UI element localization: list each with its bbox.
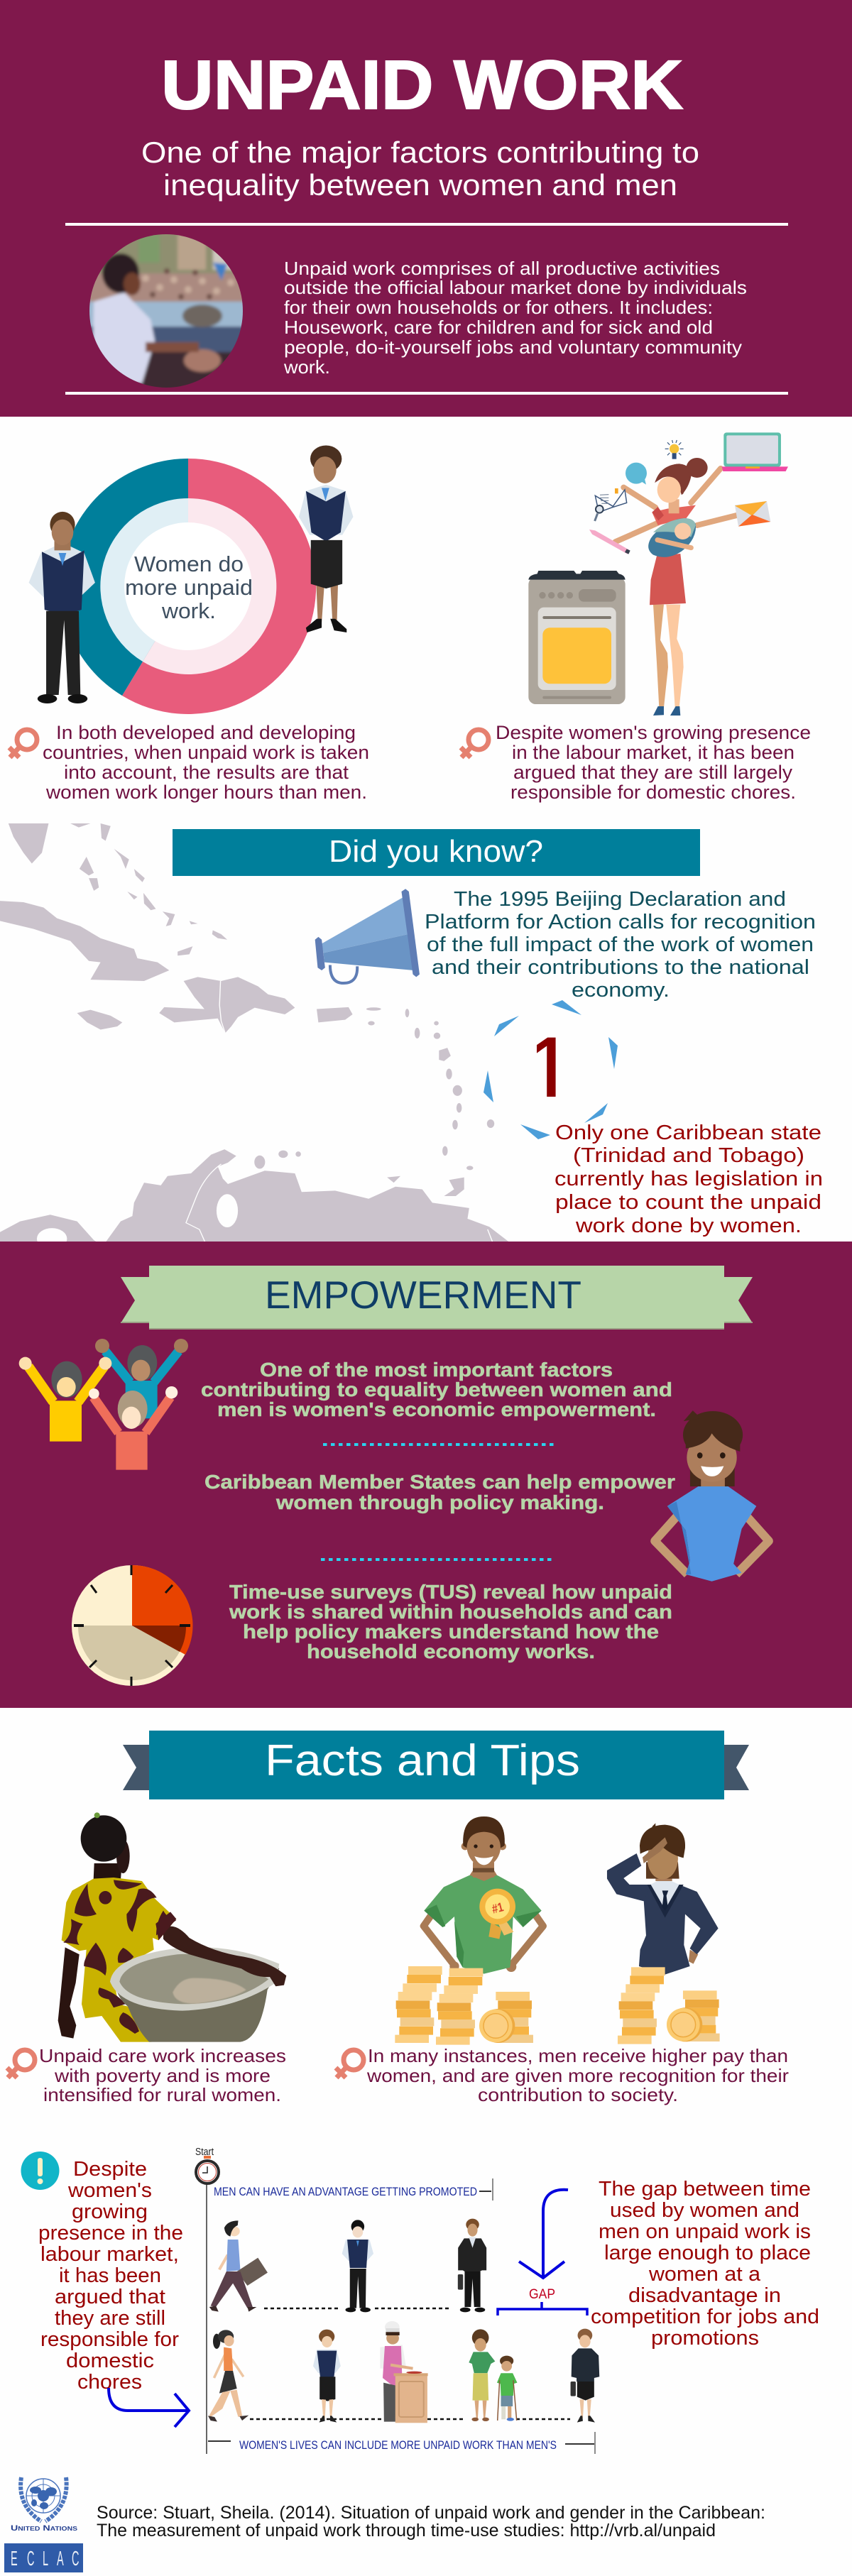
- icon: speech bubble: [626, 463, 647, 485]
- icon: stopwatch: [196, 2156, 219, 2183]
- caption: domestic chores: Despite women's growing presence: [496, 722, 811, 743]
- text: women's responsibility for chores: responsible for: [40, 2328, 179, 2351]
- caption: domestic chores: [496, 722, 811, 803]
- text: gap explanation: The gap between time: [599, 2178, 811, 2200]
- label: women's unpaid work: WOMEN'S LIVES CAN INCLUDE MORE UNPAID WORK THAN MEN'S: [239, 2438, 557, 2452]
- icon: venus symbol: [7, 2050, 35, 2078]
- text: gap explanation: promotions: [651, 2327, 759, 2350]
- figure: woman with child on crutches: [469, 2329, 517, 2421]
- text: women's responsibility for chores: it has been: [59, 2264, 161, 2287]
- donut label: work.: [161, 598, 216, 623]
- icon: laptop: [722, 432, 788, 471]
- text: time-use surveys: help policy makers understand how the: [243, 1621, 659, 1643]
- text: policy making: [204, 1471, 675, 1513]
- caption: women work longer hours: countries, when unpaid work is taken: [43, 742, 369, 763]
- icon: woman figure: [616, 458, 740, 716]
- text: gap explanation: disadvantage in: [628, 2284, 781, 2307]
- logo: ECLAC: ECLAC: [11, 2546, 79, 2570]
- caption: domestic chores: argued that they are still largely: [513, 762, 793, 783]
- banner: empowerment: EMPOWERMENT: [265, 1273, 581, 1317]
- source note: Source: Stuart, Sheila. (2014). Situation of unpaid work and gender in the Caribbean:: [97, 2503, 765, 2523]
- intro paragraph: outside the official labour market done by individuals: [284, 277, 747, 298]
- intro paragraph: for their own households or for others. It includes:: [284, 297, 713, 318]
- figure: walking woman: [208, 2330, 248, 2422]
- text: women's responsibility for chores: Despite: [73, 2158, 147, 2181]
- text: time-use surveys: household economy works.: [307, 1640, 595, 1662]
- caption: domestic chores: responsible for domestic chores.: [510, 782, 796, 803]
- donut label: [125, 552, 253, 623]
- text: Beijing declaration: [425, 888, 816, 1002]
- icon: envelope: [735, 501, 770, 527]
- subtitle: [141, 136, 699, 202]
- text: economic empowerment: [201, 1359, 672, 1420]
- label: men's advantage: MEN CAN HAVE AN ADVANTAGE GETTING PROMOTED: [214, 2185, 477, 2198]
- icon: smiling man: #1: [491, 1900, 505, 1917]
- icon: venus symbol: [336, 2050, 364, 2078]
- start label: Start: [195, 2146, 214, 2158]
- caption: women work longer hours: into account, the results are that: [64, 762, 349, 783]
- icon: multitasking woman with oven: [528, 432, 788, 716]
- donut label: more unpaid: [125, 575, 253, 600]
- icon: man in vest: [29, 512, 95, 703]
- icon: woman in blue shirt: [655, 1410, 769, 1582]
- icon: venus symbol: [461, 730, 488, 757]
- text: Caribbean legislation: [555, 1122, 823, 1237]
- map: Caribbean: [0, 823, 509, 1249]
- text: Beijing declaration: of the full impact of the work of women: [427, 933, 814, 956]
- text: time-use surveys: work is shared within households and can: [229, 1601, 672, 1623]
- text: policy making: women through policy making.: [275, 1491, 604, 1513]
- text: gap explanation: men on unpaid work is: [599, 2220, 811, 2243]
- text: economic empowerment: One of the most important factors: [260, 1359, 613, 1381]
- text: economic empowerment: men is women's economic empowerment.: [217, 1398, 656, 1420]
- text: economic empowerment: contributing to equality between women and: [201, 1379, 672, 1401]
- text: women's responsibility for chores: chores: [77, 2371, 142, 2394]
- text: gap explanation: women at a: [648, 2263, 761, 2286]
- text: time-use surveys: [229, 1581, 672, 1662]
- logo: United Nations: [11, 2477, 78, 2533]
- figures: career stages: [208, 2219, 599, 2423]
- caption: higher pay for men: [366, 2045, 789, 2105]
- figure: man in suit: [458, 2219, 486, 2312]
- intro paragraph: people, do-it-yourself jobs and voluntary community: [284, 336, 742, 358]
- caption: rural women: intensified for rural women.: [43, 2084, 281, 2105]
- source note: [97, 2503, 765, 2541]
- banner: facts and tips: [123, 1731, 749, 1799]
- label: gap bracket: GAP: [529, 2287, 555, 2302]
- text: women's responsibility for chores: presence in the: [38, 2222, 183, 2245]
- icon: worried man with coins: [607, 1823, 720, 2044]
- icon: three women cheering: [19, 1339, 188, 1470]
- caption: women work longer hours: women work longer hours than men.: [45, 782, 367, 803]
- icon: number one in segmented circle: [484, 1000, 618, 1139]
- intro paragraph: [283, 258, 747, 378]
- text: Caribbean legislation: work done by women.: [575, 1215, 802, 1237]
- banner: did you know: Did you know?: [329, 834, 543, 869]
- figure: chef at counter: [380, 2321, 428, 2423]
- icon: smiling man: [424, 1816, 543, 1974]
- panel: empowerment: [0, 1242, 852, 1708]
- text: Caribbean legislation: currently has legislation in: [555, 1168, 823, 1190]
- text: time-use surveys: Time-use surveys (TUS) reveal how unpaid: [229, 1581, 672, 1603]
- label: gap bracket: [498, 2287, 587, 2315]
- text: gap explanation: used by women and: [610, 2199, 799, 2222]
- icon: open book and magnifier: [595, 488, 627, 521]
- arrow: gap pointer: [519, 2190, 568, 2278]
- icon: worried man: [607, 1823, 719, 1975]
- text: women's responsibility for chores: domestic: [66, 2350, 154, 2372]
- text: Beijing declaration: Platform for Action calls for recognition: [425, 911, 816, 933]
- icon: clock pie chart: [72, 1565, 193, 1686]
- photo: woman cooking: [89, 234, 243, 388]
- panel: header: [0, 0, 852, 417]
- caption: higher pay for men: women, and are given more recognition for their: [366, 2065, 789, 2086]
- source note: The measurement of unpaid work through time-use studies: http://vrb.al/unpaid: [97, 2521, 716, 2541]
- text: women's responsibility for chores: [38, 2158, 183, 2394]
- subtitle: One of the major factors contributing to: [141, 136, 699, 169]
- logo: ECLAC: [4, 2543, 83, 2572]
- arrow: to women's timeline: [109, 2388, 189, 2427]
- text: Beijing declaration: and their contributions to the national: [432, 956, 809, 979]
- text: gap explanation: [591, 2178, 819, 2350]
- text: Caribbean legislation: (Trinidad and Tobago): [573, 1144, 804, 1167]
- intro paragraph: Unpaid work comprises of all productive activities: [284, 258, 720, 279]
- icon: exclamation mark: [21, 2152, 60, 2190]
- text: women's responsibility for chores: women's: [67, 2179, 152, 2202]
- text: Beijing declaration: economy.: [572, 979, 670, 1002]
- intro paragraph: work.: [283, 356, 330, 378]
- icon: coin stacks: [395, 1966, 533, 2045]
- banner: facts and tips: Facts and Tips: [265, 1736, 580, 1785]
- text: Caribbean legislation: Only one Caribbean state: [555, 1122, 821, 1144]
- icon: megaphone: [315, 889, 420, 983]
- caption: domestic chores: in the labour market, it has been: [512, 742, 794, 763]
- chart: donut women do more unpaid work: [60, 459, 316, 714]
- icon: number one in segmented circle: 1: [522, 1016, 577, 1127]
- title: UNPAID WORK: [161, 46, 683, 124]
- text: Caribbean legislation: place to count the unpaid: [555, 1191, 821, 1214]
- figure: walking man: [209, 2220, 268, 2312]
- text: women's responsibility for chores: labour market,: [40, 2243, 179, 2266]
- caption: women work longer hours: In both developed and developing: [56, 722, 356, 743]
- text: gap explanation: competition for jobs and: [591, 2306, 819, 2328]
- caption: rural women: Unpaid care work increases: [39, 2045, 286, 2066]
- chart: timeline of men's and women's lives: [195, 2146, 599, 2454]
- text: women's responsibility for chores: argued that: [55, 2286, 165, 2308]
- banner: empowerment: [121, 1266, 753, 1330]
- icon: venus symbol: [9, 730, 37, 757]
- text: Beijing declaration: The 1995 Beijing Declaration and: [454, 888, 786, 911]
- icon: coin stacks: [618, 1967, 720, 2044]
- icon: oven: [528, 571, 626, 704]
- text: policy making: Caribbean Member States can help empower: [204, 1471, 675, 1493]
- banner: did you know: [173, 829, 700, 876]
- text: gap explanation: large enough to place: [604, 2242, 811, 2264]
- icon: smiling man with coins: [395, 1816, 543, 2045]
- icon: pencil: [589, 530, 630, 554]
- text: women's responsibility for chores: they are still: [55, 2307, 165, 2330]
- figure: woman in suit: [571, 2329, 599, 2423]
- icon: woman in vest: [299, 445, 353, 632]
- caption: rural women: with poverty and is more: [54, 2065, 271, 2086]
- subtitle: inequality between women and men: [163, 168, 677, 202]
- text: women's responsibility for chores: growing: [72, 2200, 148, 2223]
- figure: man in vest: [342, 2220, 373, 2312]
- caption: women work longer hours: [43, 722, 369, 803]
- photo: woman carrying a bowl: [58, 1812, 286, 2042]
- figure: woman in vest: [313, 2330, 341, 2423]
- caption: rural women: [39, 2045, 286, 2105]
- intro paragraph: Housework, care for children and for sick and old: [284, 317, 713, 338]
- caption: higher pay for men: contribution to society.: [478, 2084, 678, 2105]
- logo: United Nations: United Nations: [11, 2524, 78, 2533]
- caption: higher pay for men: In many instances, men receive higher pay than: [368, 2045, 788, 2066]
- icon: light bulb: [665, 440, 684, 459]
- donut label: Women do: [134, 552, 244, 576]
